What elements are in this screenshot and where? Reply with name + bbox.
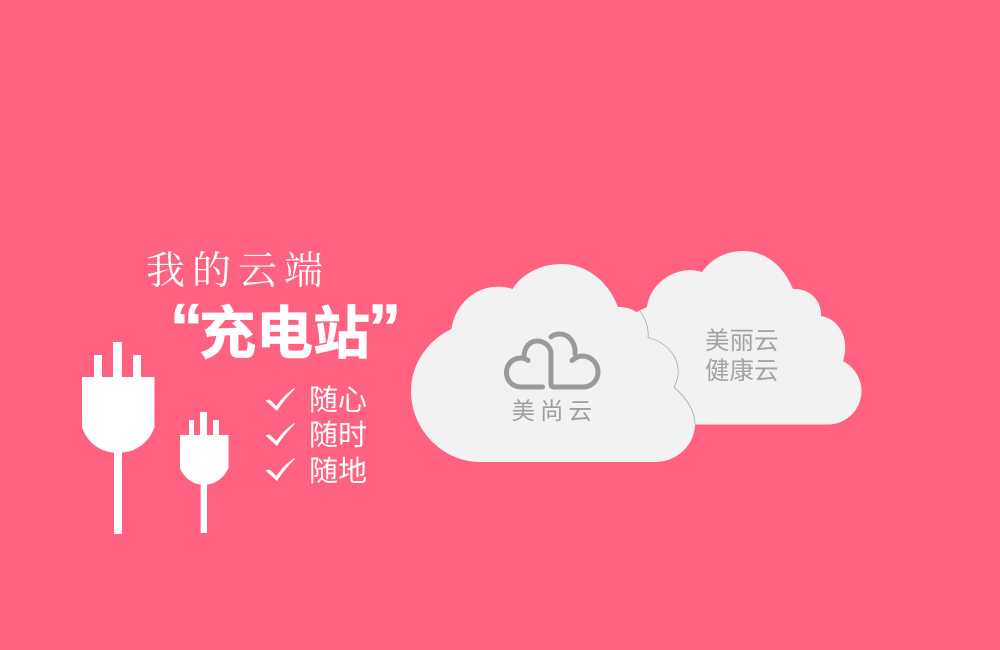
- icon: check 2: [266, 423, 295, 446]
- label: Meishang cloud: 美尚云: [512, 398, 597, 424]
- heading: charging station: 充电站: [199, 288, 370, 370]
- label: beauty and health cloud: 美丽云: [705, 327, 778, 355]
- cloud shape: back: [620, 251, 862, 424]
- icon: Meishang cloud logo: [506, 334, 598, 387]
- title: my cloud: 我的云端: [146, 250, 330, 293]
- back cloud: 健康云: [705, 357, 778, 385]
- icon: large plug: [82, 342, 154, 534]
- heading: charging station: ”: [368, 290, 401, 364]
- list: anywhere anytime: [266, 384, 367, 488]
- heading: charging station: “: [170, 290, 203, 364]
- list item 3: 随地: [309, 455, 367, 488]
- front cloud: [411, 264, 695, 462]
- overlap outline: [640, 311, 695, 424]
- cloud shape: front: [411, 264, 695, 462]
- back cloud: [620, 251, 862, 424]
- icon: check 1: [266, 388, 295, 411]
- icon: check 3: [266, 458, 295, 481]
- list item 2: 随时: [309, 419, 367, 452]
- icon: small plug: [180, 412, 228, 533]
- list item 1: 随心: [309, 384, 367, 417]
